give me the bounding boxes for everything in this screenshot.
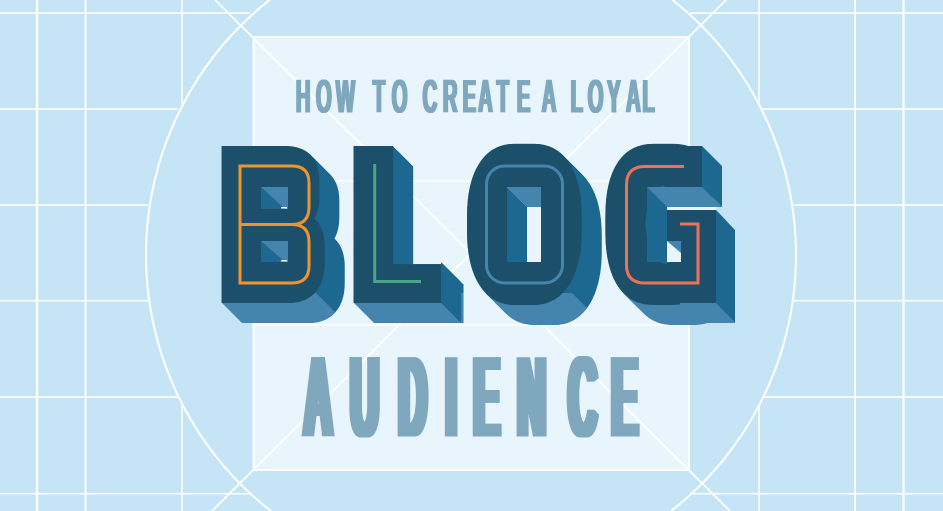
construction circle arcs xyxy=(146,0,796,511)
extrusion: bottom faces: BLOG xyxy=(223,109,716,339)
letter B counters xyxy=(255,180,295,268)
heading: audience: AUDIENCE xyxy=(304,333,638,462)
letter O counter xyxy=(500,180,550,270)
panel construction lines xyxy=(212,0,730,511)
extrusion: side faces: BLOG xyxy=(223,109,716,339)
letter G block facets xyxy=(680,146,735,323)
letter G coral inline xyxy=(626,166,698,283)
letter G block corners xyxy=(665,146,716,303)
letter L green inline xyxy=(375,164,421,282)
letter G counter xyxy=(647,187,722,262)
heading: how to create a loyal: HOW TO CREATE A LOYAL xyxy=(296,70,655,123)
letter B orange inline xyxy=(240,166,309,283)
title word: blog xyxy=(222,144,735,325)
letter L foot facets xyxy=(400,262,461,323)
letter faces: BLOG xyxy=(223,109,716,339)
letter O blue inline xyxy=(486,166,562,283)
central light panel xyxy=(254,37,689,470)
